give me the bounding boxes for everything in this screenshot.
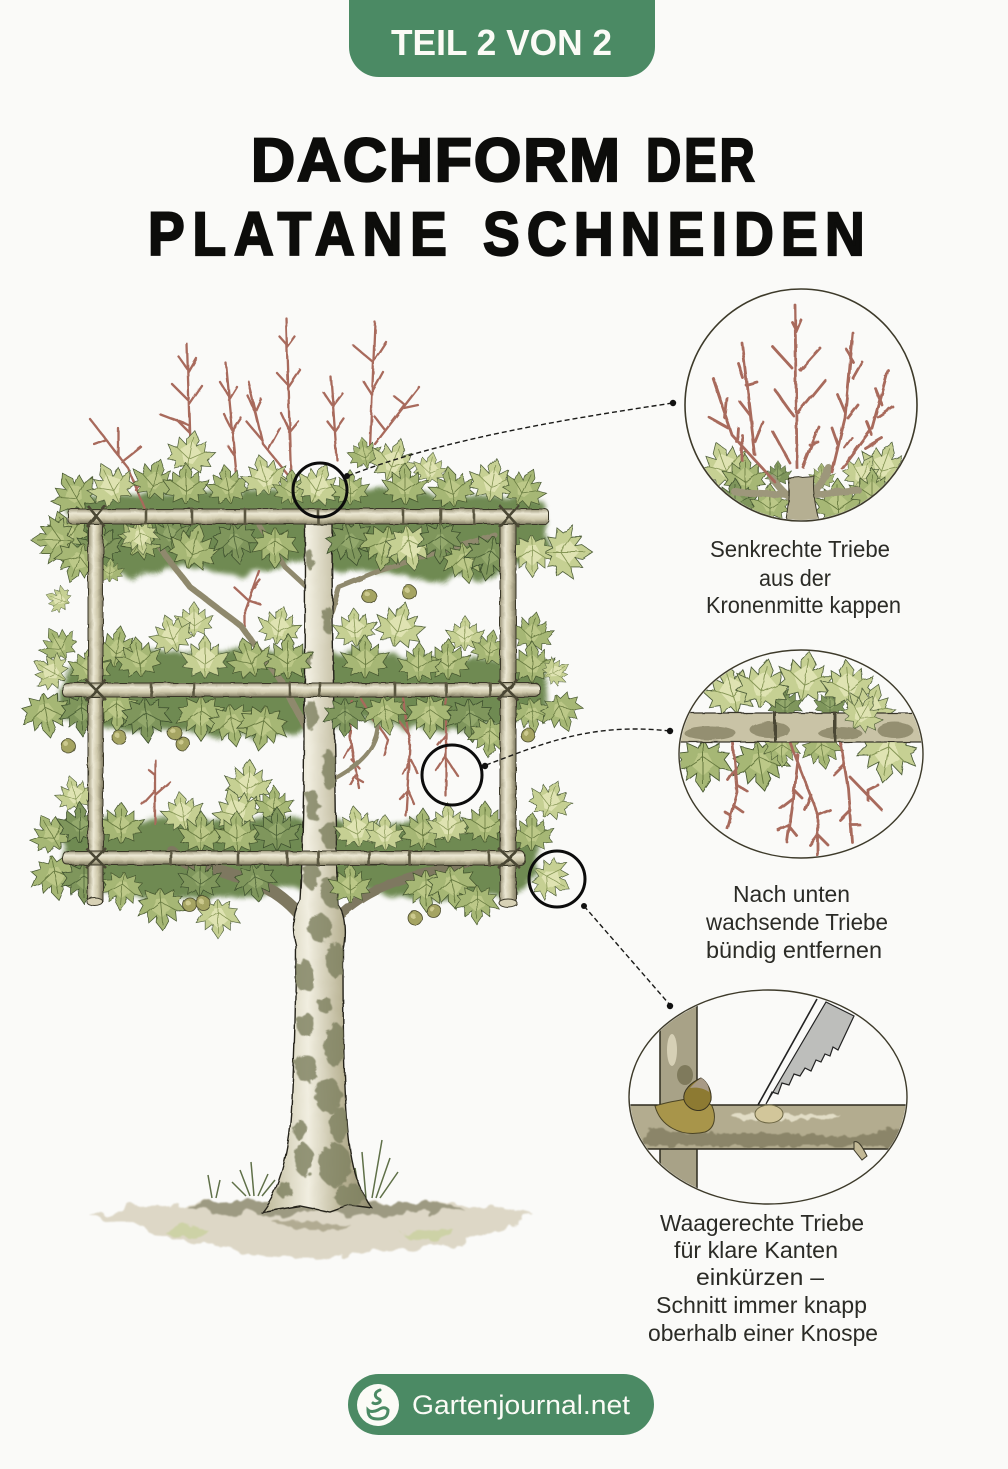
branches bbox=[146, 523, 495, 915]
caption 1: Senkrechte Triebe bbox=[710, 536, 890, 562]
trellis posts bbox=[87, 520, 517, 907]
caption 3 bbox=[648, 1210, 878, 1346]
dark foliage masses bbox=[60, 488, 550, 900]
header badge bbox=[349, 0, 655, 77]
title: DER bbox=[646, 126, 755, 194]
caption 1 bbox=[706, 536, 901, 618]
connector 2 bbox=[482, 728, 673, 769]
caption 2: bündig entfernen bbox=[706, 937, 882, 963]
footer badge bbox=[348, 1374, 654, 1435]
leaves middle band bbox=[18, 596, 589, 760]
icon: plant pot logo bbox=[357, 1384, 399, 1426]
caption 3: Schnitt immer knapp bbox=[656, 1292, 867, 1318]
title bbox=[148, 126, 865, 269]
ground with grass bbox=[88, 1140, 535, 1260]
footer badge: Gartenjournal.net bbox=[412, 1390, 631, 1420]
caption 3: einkürzen – bbox=[696, 1264, 824, 1290]
leaves lower band bbox=[22, 758, 581, 939]
seed balls bbox=[61, 585, 535, 925]
leaves top band bbox=[31, 426, 593, 616]
caption 3: für klare Kanten bbox=[674, 1237, 838, 1263]
caption 1: aus der bbox=[759, 565, 831, 591]
connector 1 bbox=[344, 400, 676, 479]
trunk bbox=[262, 524, 372, 1212]
caption 2: wachsende Triebe bbox=[705, 909, 888, 935]
caption 3: oberhalb einer Knospe bbox=[648, 1320, 878, 1346]
callout ring: horizontal shoot bbox=[529, 851, 585, 907]
caption 3: Waagerechte Triebe bbox=[660, 1210, 864, 1236]
inset 3: saw cut bbox=[625, 990, 915, 1210]
caption 1: Kronenmitte kappen bbox=[706, 592, 901, 618]
upright shoots bbox=[90, 318, 458, 824]
caption 2: Nach unten bbox=[733, 881, 850, 907]
inset 1: upright shoots bbox=[685, 289, 917, 525]
tree bbox=[18, 318, 593, 1212]
title: PLATANE bbox=[148, 200, 447, 269]
title: DACHFORM bbox=[251, 126, 620, 194]
callout ring: downward shoot bbox=[422, 745, 482, 805]
title: SCHNEIDEN bbox=[483, 200, 865, 269]
caption 2 bbox=[705, 881, 888, 963]
trellis rails bbox=[62, 505, 549, 868]
header badge: TEIL 2 VON 2 bbox=[391, 22, 612, 63]
connector 3 bbox=[581, 903, 673, 1009]
callout ring: crown centre bbox=[293, 463, 347, 517]
inset 2: downward shoots bbox=[672, 647, 930, 858]
